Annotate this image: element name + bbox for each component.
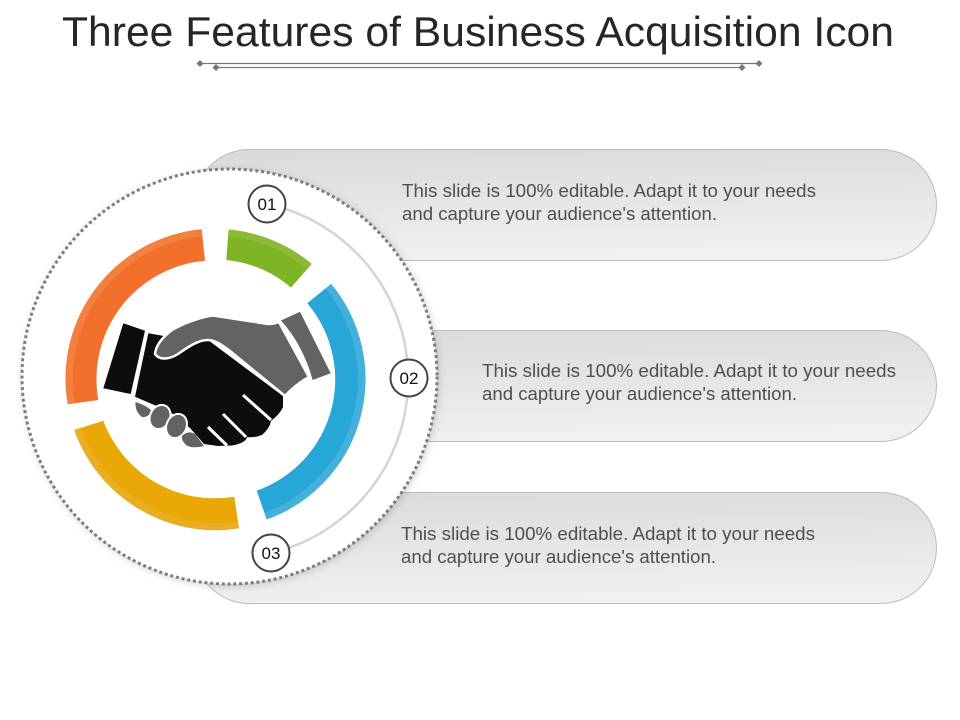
- connector arc: [267, 204, 408, 553]
- text: feature 3: This slide is 100% editable. Adapt it to your needs: [401, 523, 815, 544]
- ring segment: yellow: [74, 421, 239, 530]
- badge 02: 02: [400, 369, 418, 388]
- ring segment: orange: [65, 229, 205, 404]
- badge 03: [252, 534, 290, 572]
- text: feature 1: and capture your audience's attention.: [402, 203, 717, 224]
- title underline ornament: [196, 60, 762, 71]
- panel: feature 1: [194, 150, 936, 260]
- ring segment: green: [226, 230, 312, 288]
- text: feature 2: This slide is 100% editable. Adapt it to your needs: [482, 360, 896, 381]
- panel: feature 3: [194, 492, 936, 604]
- text: feature 2: and capture your audience's attention.: [482, 383, 797, 404]
- text: feature 1: This slide is 100% editable. Adapt it to your needs: [402, 180, 816, 201]
- badge 03: 03: [262, 544, 280, 563]
- badge 01: [248, 186, 286, 222]
- badge 02: [390, 360, 428, 396]
- ring segment: blue: [257, 284, 365, 519]
- text: feature 3: and capture your audience's attention.: [401, 546, 716, 567]
- central circle: [22, 169, 439, 586]
- badge 01: 01: [258, 195, 276, 214]
- icon: handshake: [103, 312, 331, 447]
- title: Three Features of Business Acquisition Icon: [62, 8, 894, 55]
- panel: feature 2: [194, 330, 936, 442]
